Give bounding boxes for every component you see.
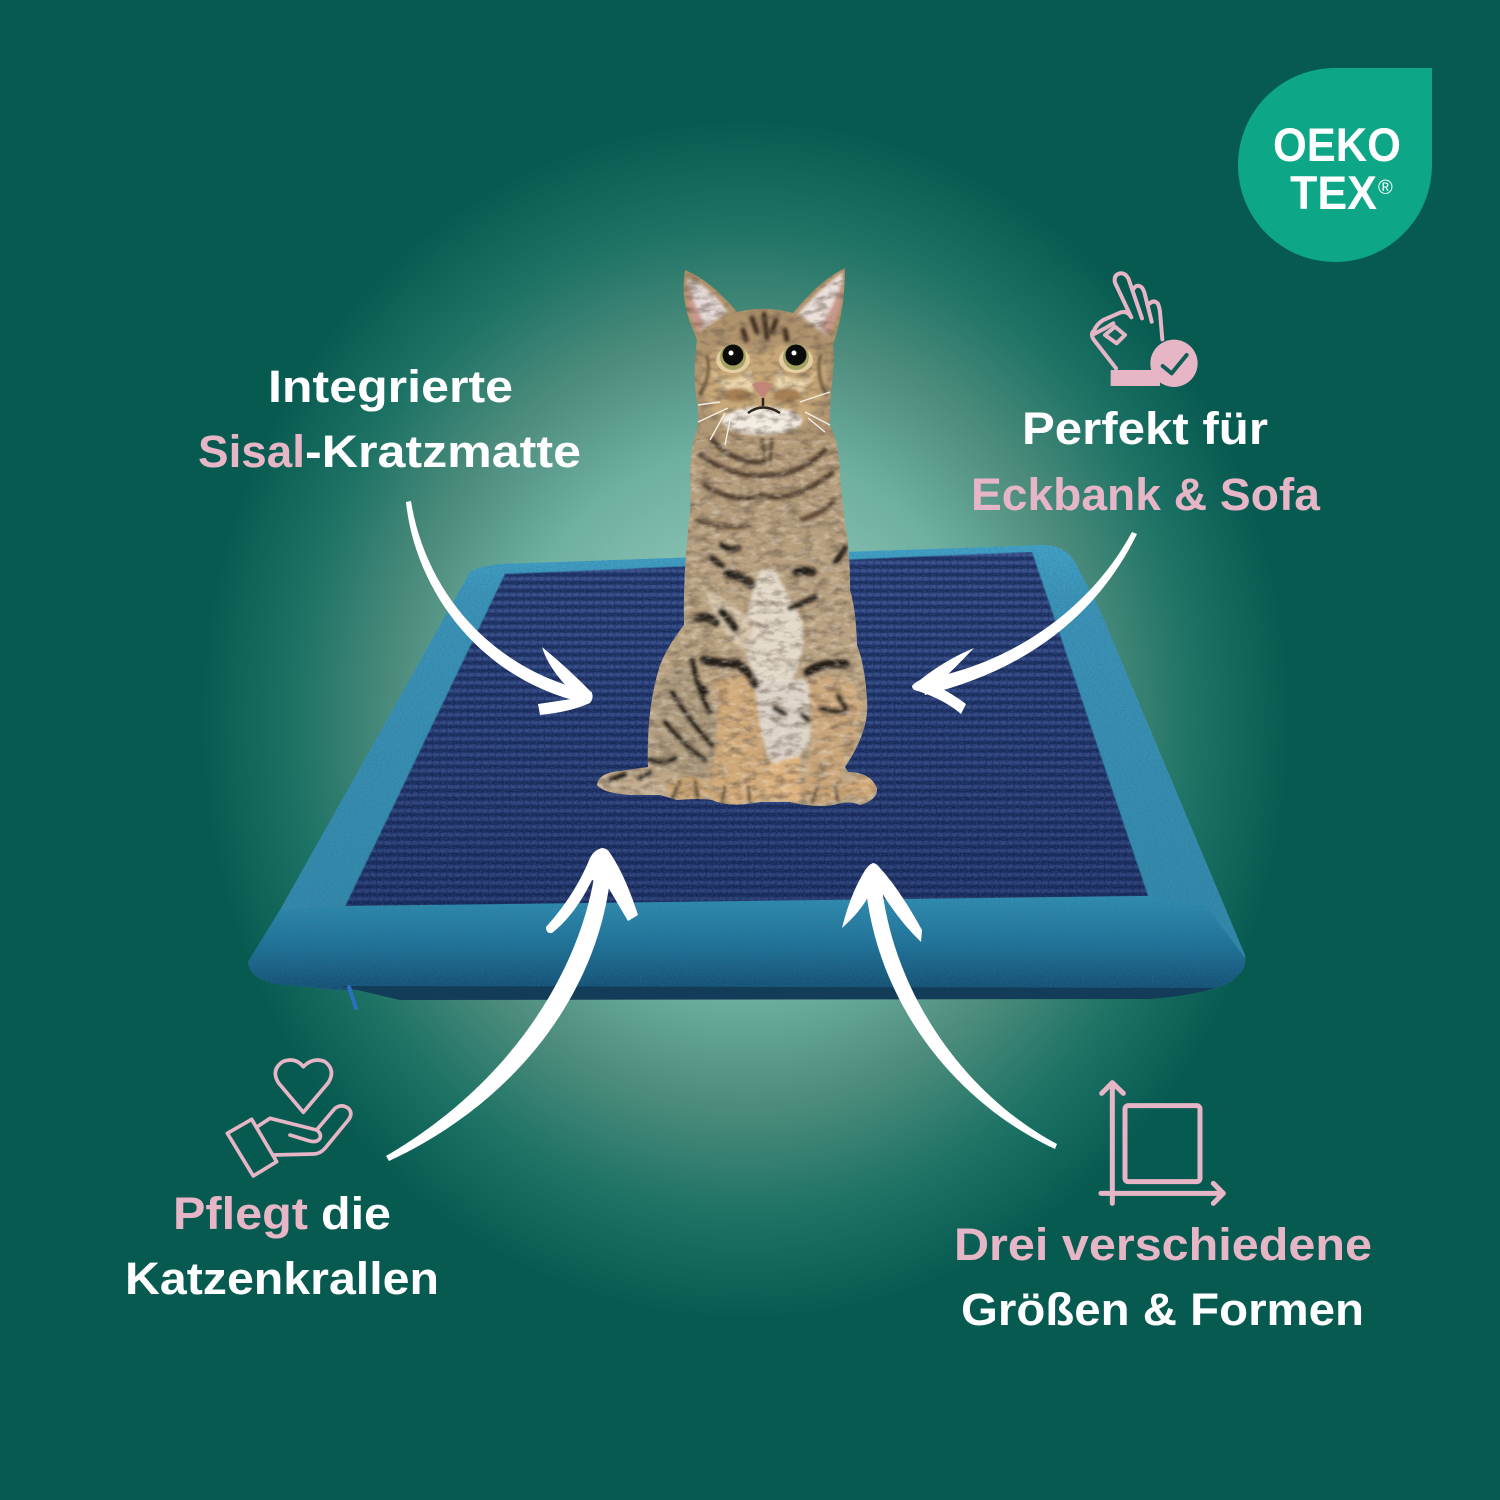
badge text: OEKO — [1273, 118, 1401, 171]
arrow: top right — [912, 532, 1137, 714]
ears — [687, 278, 728, 332]
hind leg and haunch — [651, 660, 720, 780]
oeko-tex badge: TEX — [1290, 166, 1377, 219]
mat front flap — [248, 896, 1245, 992]
chest — [746, 570, 804, 700]
cat eyes — [716, 344, 813, 373]
check badge — [1150, 340, 1198, 387]
heading: integrated sisal mat: Sisal — [198, 426, 305, 477]
icon: ok hand with check — [1092, 273, 1198, 387]
heading: perfect for corner bench — [971, 403, 1321, 520]
arrow: top left — [406, 501, 593, 715]
heading: cares for claws: Pflegt — [173, 1188, 308, 1239]
mat bottom seam — [340, 986, 1215, 1000]
cat nose — [752, 382, 773, 398]
front legs — [712, 675, 768, 804]
icon: heart in hand — [227, 1060, 351, 1176]
sisal surface — [345, 552, 1148, 907]
background glow — [200, 120, 1290, 1320]
toe lines — [672, 780, 838, 805]
white chin — [722, 407, 802, 435]
heading: three sizes and shapes — [954, 1219, 1372, 1335]
heading: cares for claws: die — [321, 1188, 391, 1239]
belly — [755, 680, 810, 770]
cuff — [1111, 370, 1160, 386]
heading: three sizes and shapes: Größen & Formen — [961, 1284, 1364, 1335]
heading: integrated sisal mat: -Kratzmatte — [305, 426, 581, 477]
sisal shading — [345, 552, 1148, 907]
arrow: bottom right — [842, 863, 1057, 1149]
cat silhouette — [597, 268, 877, 806]
fur mottling light — [590, 440, 885, 810]
cat photo illustration — [590, 260, 885, 810]
muzzle — [724, 388, 752, 402]
forehead markings — [743, 314, 787, 340]
zipper pull — [349, 987, 356, 1008]
heading: three sizes and shapes: Drei verschiedene — [954, 1219, 1372, 1270]
heading: cares for claws — [125, 1188, 439, 1304]
oeko-tex badge: ® — [1378, 177, 1393, 199]
heading: perfect for corner bench: Perfekt für — [1022, 403, 1268, 454]
icon: size dimensions — [1101, 1083, 1223, 1203]
fur mottling dark — [590, 260, 885, 810]
neck stripes — [700, 440, 832, 498]
mat fabric border — [248, 545, 1245, 992]
badge leaf shape — [1238, 68, 1432, 262]
heading: integrated sisal mat: Integrierte — [268, 361, 513, 412]
check mark — [1163, 355, 1187, 373]
arrow: bottom left — [386, 848, 638, 1161]
face — [701, 344, 826, 432]
oeko-tex badge — [1238, 68, 1432, 262]
heading: perfect for corner bench: Eckbank & Sofa — [971, 469, 1321, 520]
paws — [666, 776, 714, 800]
fabric texture — [240, 540, 1250, 1000]
whiskers — [698, 392, 830, 445]
scratching mat — [240, 540, 1250, 1008]
heading: integrated sisal mat — [198, 361, 581, 477]
dark body spots — [610, 545, 846, 780]
tail — [597, 770, 665, 795]
cat mouth — [748, 398, 780, 413]
cat fur details — [597, 272, 876, 805]
heading: cares for claws: Katzenkrallen — [125, 1253, 439, 1304]
